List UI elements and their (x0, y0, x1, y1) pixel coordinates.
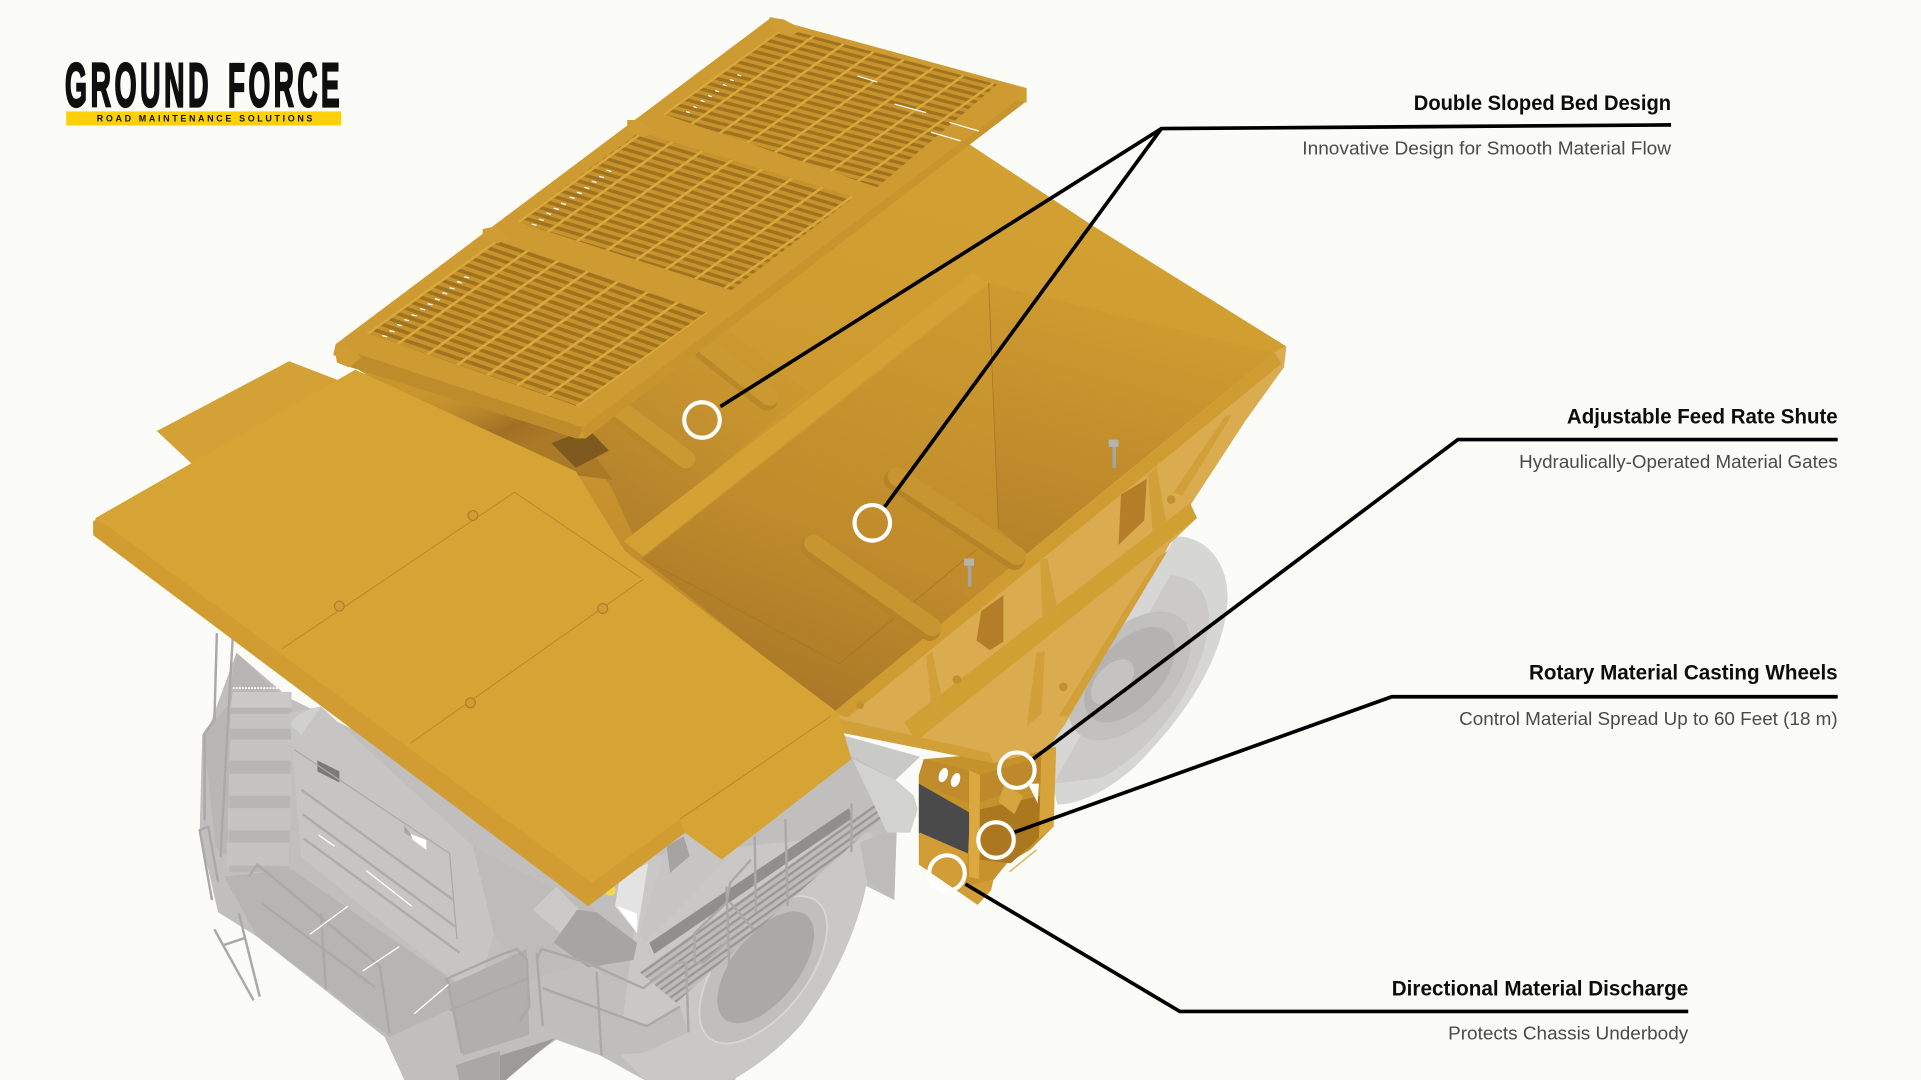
marker: bed slope 2 (855, 505, 890, 541)
grey haul truck (200, 536, 1228, 1080)
cab side panels (224, 707, 727, 1056)
support struts (617, 347, 1017, 631)
floor underside (500, 1038, 555, 1080)
callout: Rotary Material Casting Wheels: Control Material Spread Up to 60 Feet (18 m) (1459, 708, 1838, 729)
callout: Directional Material Discharge (1392, 976, 1689, 1044)
hopper front wall (821, 347, 1286, 763)
service vent grille (640, 803, 883, 1003)
logo: Ground Force: ROAD MAINTENANCE SOLUTIONS (97, 114, 312, 124)
platform handrails (214, 803, 851, 1056)
marker: bed slope 1 (684, 402, 720, 438)
central rib (624, 273, 989, 556)
callout: Directional Material Discharge: Protects Chassis Underbody (1448, 1023, 1689, 1044)
front tyre (619, 833, 872, 1080)
callout: Double Sloped Bed Design: Double Sloped Bed Design (1414, 90, 1671, 115)
screen panel 3 (366, 240, 708, 407)
screen panel 1 (663, 28, 997, 187)
callout: Double Sloped Bed Design: Innovative Design for Smooth Material Flow (1302, 137, 1672, 158)
callout: Adjustable Feed Rate Shute: Hydraulically-Operated Material Gates (1519, 451, 1838, 472)
truck body silhouette (200, 653, 914, 1080)
logo: Ground Force: GROUND (65, 51, 212, 121)
white gaps in bodywork (310, 835, 448, 1014)
fender flap (823, 730, 920, 900)
wall ribs (821, 414, 1232, 763)
spreader deck plates (93, 361, 851, 906)
callout: Adjustable Feed Rate Shute: Adjustable Feed Rate Shute (1567, 404, 1838, 429)
text: FORCE (228, 51, 343, 121)
marker: casting wheels (978, 822, 1014, 858)
yellow marker lamp (605, 885, 616, 896)
spreader chute assembly (919, 747, 1056, 905)
lower bed plate (642, 284, 1027, 713)
callout: Double Sloped Bed Design (1302, 90, 1672, 158)
stairs (200, 633, 292, 900)
leader line: directional material discharge (965, 884, 1688, 1011)
inspection windows (1119, 479, 1147, 545)
callout: Rotary Material Casting Wheels (1459, 660, 1838, 729)
marker: feed rate shute (999, 752, 1035, 788)
leader line: double sloped bed design (720, 125, 1671, 407)
light gaps in screen edges (382, 75, 979, 337)
screen panel 2 (517, 132, 854, 290)
wall bolts (856, 495, 1176, 709)
leader line: rotary material casting wheels (1013, 697, 1838, 833)
plate seams (282, 492, 831, 819)
hydraulic pins (963, 440, 1121, 595)
rear tyre, upper right (1041, 536, 1228, 804)
hopper bed interior (355, 143, 1286, 722)
leader line: double sloped bed design, second point (885, 129, 1161, 507)
grizzly screen panels (333, 17, 1027, 438)
callout: Adjustable Feed Rate Shute (1519, 404, 1838, 472)
plate bolts (334, 511, 608, 708)
cross bar (904, 503, 1197, 741)
leader line: adjustable feed rate shute (1033, 440, 1838, 759)
marker: material discharge (929, 855, 965, 891)
callout: Rotary Material Casting Wheels: Rotary Material Casting Wheels (1529, 660, 1838, 685)
panel mounting lugs (334, 17, 1027, 367)
callout: Directional Material Discharge: Directional Material Discharge (1392, 976, 1688, 1001)
